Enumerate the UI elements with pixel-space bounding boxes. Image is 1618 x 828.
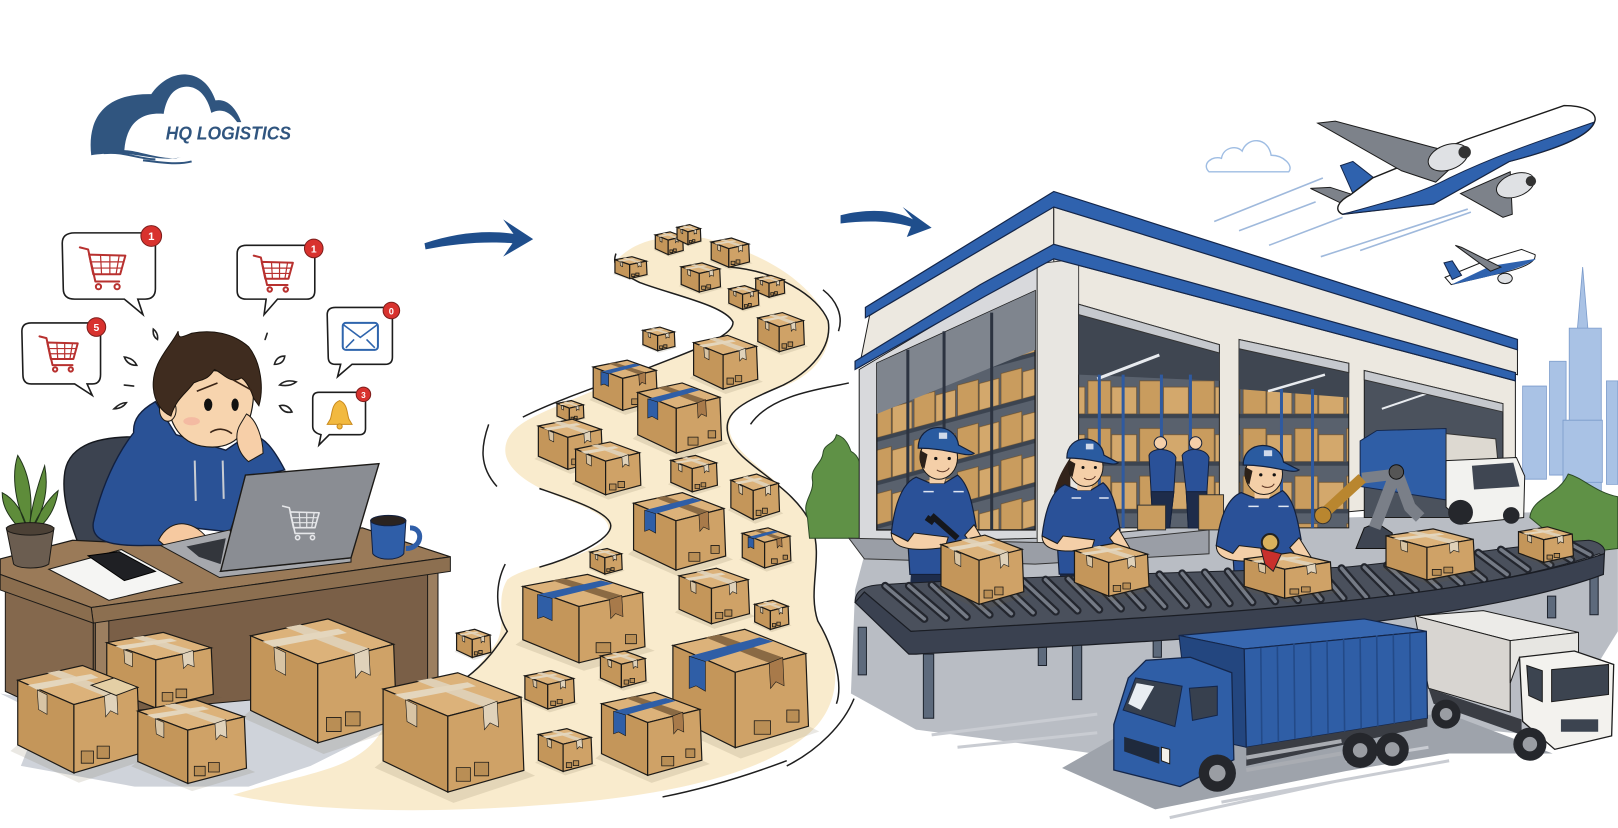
upper wall right: [1054, 207, 1517, 375]
floor shadow under desk boxes: [0, 678, 414, 787]
office chair: [64, 437, 135, 542]
robotic arm: [1315, 465, 1420, 549]
conveyor legs: [858, 574, 1598, 718]
loading bay three: [1364, 371, 1503, 518]
loading dock base: [849, 530, 1209, 564]
conveyor roller bed: [855, 540, 1605, 718]
bubble: bell alert: [313, 387, 371, 445]
background workers: [1138, 437, 1224, 530]
warehouse building: [849, 191, 1517, 564]
bubble: cart alert three: [22, 318, 106, 395]
upper wall left: [859, 207, 1054, 367]
ground brush streaks: [932, 714, 1449, 818]
corner pillar: [1037, 259, 1079, 543]
airplane cloud: [1206, 141, 1290, 172]
city skyline: [1523, 267, 1618, 494]
bubble: cart alert one: 1: [148, 231, 155, 243]
worker taping: [1216, 445, 1313, 599]
tape dispenser: [1261, 534, 1281, 571]
desk top: [0, 528, 450, 608]
potted plant: [2, 455, 58, 568]
papers and phone: [49, 550, 182, 600]
logo wordmark: HQ LOGISTICS: [166, 124, 291, 144]
white delivery truck: [1415, 611, 1614, 761]
logo: HQ Logistics: [91, 74, 291, 163]
worker with scanner: [891, 428, 988, 589]
desk body: [5, 582, 93, 714]
coffee mug: [371, 515, 420, 559]
path outline strokes: [466, 254, 854, 797]
speed lines: [1214, 178, 1471, 257]
lower wall left: [859, 264, 1037, 543]
bubble: bell alert: 3: [361, 391, 366, 400]
laptop cart logo: [283, 506, 319, 540]
arrow: first step: [424, 219, 533, 257]
bubble: cart alert three: 5: [94, 323, 100, 334]
conveyor side frame: [855, 554, 1604, 654]
notification bubbles: [22, 226, 400, 445]
ground shadow under trucks: [1062, 714, 1553, 809]
cartons beside the desk: [10, 619, 535, 803]
rear blue truck: [1360, 428, 1525, 525]
stress marks around the head: [114, 329, 296, 412]
blue delivery truck: [1114, 619, 1427, 792]
parcels travelling along the path: [515, 225, 819, 783]
loading bay one: [1079, 304, 1219, 528]
person in blue hoodie: [93, 331, 285, 549]
laptop: [161, 464, 379, 578]
logo waves: [104, 153, 192, 163]
bubble: cart alert two: [237, 239, 323, 315]
right bush: [1530, 474, 1618, 554]
warehouse yard ground: [851, 512, 1618, 766]
bubble: email alert: [327, 302, 400, 377]
cream path of parcels: [233, 237, 835, 810]
upper blue roof band: [865, 191, 1517, 350]
lower wall right: [1054, 259, 1515, 538]
worker packing: [1042, 439, 1131, 587]
cab: [1114, 657, 1234, 787]
desk scene: [0, 331, 450, 714]
loading bay two: [1239, 339, 1349, 528]
bubble: cart alert one: [62, 226, 162, 315]
bubble: cart alert two: 1: [311, 245, 317, 256]
lower blue roof band: [855, 244, 1515, 381]
loose package on carton: [91, 678, 138, 696]
large airplane: [1310, 106, 1595, 217]
arrow: second step: [841, 207, 932, 237]
small airplane: [1444, 245, 1536, 285]
bubble: email alert: 0: [389, 307, 394, 317]
logo cloud mark: [91, 74, 241, 159]
glazed side with shelves: [877, 291, 1035, 530]
cartons on conveyor: [936, 527, 1578, 611]
tree beside warehouse: [806, 435, 861, 538]
